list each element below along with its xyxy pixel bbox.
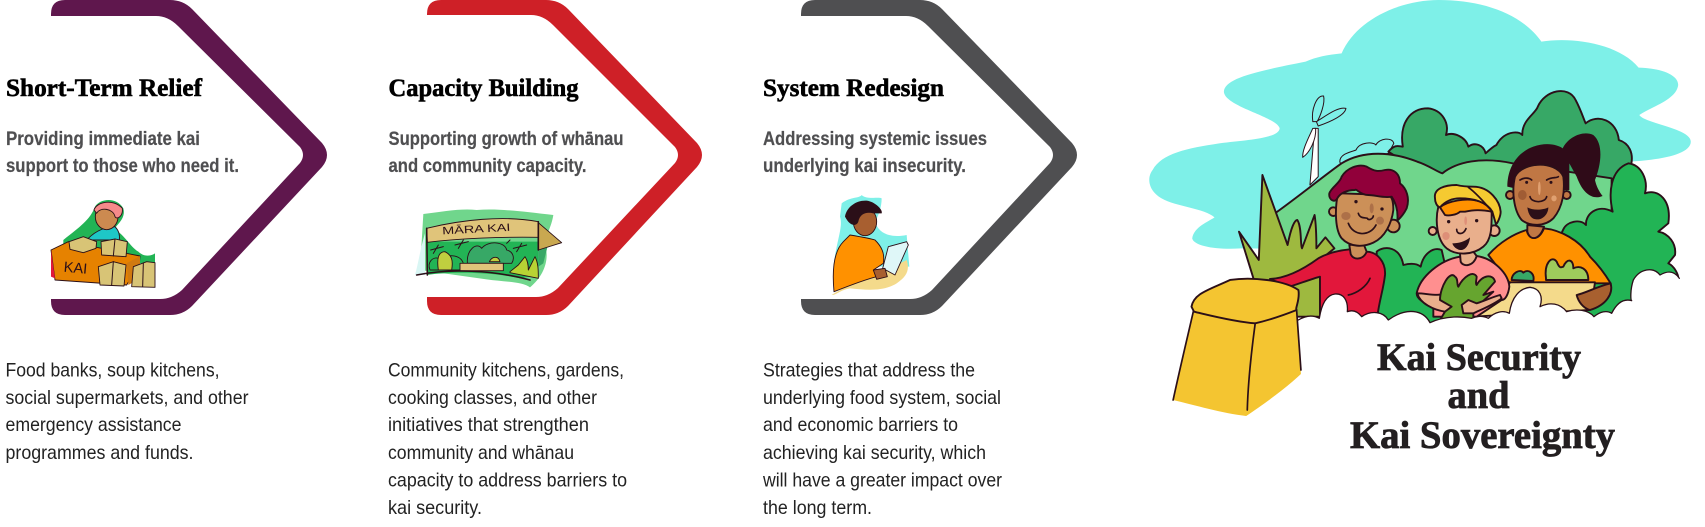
illustration: landscape background bbox=[1149, 0, 1691, 317]
icon: person with tablet bbox=[832, 195, 909, 295]
bush between people bbox=[1377, 248, 1460, 330]
panel: system redesign bbox=[762, 0, 1077, 519]
body text: short-term relief: Food banks, soup kitchens, bbox=[6, 360, 220, 382]
cloud bbox=[1149, 0, 1691, 250]
title: kai security and kai sovereignty bbox=[1350, 336, 1615, 457]
subheading: short-term relief: Providing immediate kai bbox=[6, 128, 200, 150]
body text: capacity building: Community kitchens, gardens, bbox=[388, 360, 624, 382]
body text: system redesign: Strategies that address the bbox=[763, 360, 975, 382]
white scalloped ground bbox=[1298, 270, 1705, 420]
heading: short-term relief: Short-Term Relief bbox=[6, 75, 203, 102]
body text: system redesign: the long term. bbox=[763, 497, 872, 519]
subheading: capacity building: Supporting growth of whānau bbox=[388, 128, 624, 150]
title: kai security and kai sovereignty: and bbox=[1448, 374, 1510, 417]
icon: food bank stall: KAI bbox=[63, 260, 88, 278]
person: orange shirt with ponytail bbox=[1473, 133, 1678, 320]
body text: capacity building bbox=[388, 360, 627, 519]
chevron: purple bbox=[51, 0, 327, 315]
person: boy with yellow cap bbox=[1417, 185, 1509, 320]
body text: capacity building: cooking classes, and other bbox=[388, 387, 597, 409]
subheading: short-term relief bbox=[6, 128, 239, 177]
body text: system redesign: and economic barriers to bbox=[763, 414, 958, 436]
panel: short-term relief bbox=[6, 0, 327, 464]
subheading: system redesign: Addressing systemic issues bbox=[763, 128, 987, 150]
chevron: grey bbox=[801, 0, 1077, 315]
yellow box bbox=[1173, 279, 1301, 416]
subheading: system redesign bbox=[763, 128, 987, 177]
body text: short-term relief: emergency assistance bbox=[6, 414, 182, 436]
body text: short-term relief: social supermarkets, and other bbox=[6, 387, 249, 409]
subheading: short-term relief: support to those who need it. bbox=[6, 155, 239, 177]
chevron: red bbox=[427, 0, 702, 315]
subheading: capacity building: and community capacity. bbox=[388, 155, 586, 177]
body text: short-term relief bbox=[6, 360, 249, 464]
right bush bbox=[1520, 163, 1678, 320]
heading: system redesign: System Redesign bbox=[763, 75, 944, 102]
icon: māra kai garden: MĀRA KAI bbox=[442, 222, 511, 237]
title: kai security and kai sovereignty: Kai Sovereignty bbox=[1350, 414, 1615, 457]
subheading: capacity building bbox=[388, 128, 624, 177]
body text: system redesign: will have a greater impact over bbox=[762, 469, 1002, 491]
heading: capacity building: Capacity Building bbox=[388, 75, 579, 102]
body text: capacity building: initiatives that strengthen bbox=[388, 414, 589, 436]
body text: capacity building: capacity to address barriers to bbox=[388, 469, 627, 491]
body text: system redesign bbox=[762, 360, 1002, 519]
body text: short-term relief: programmes and funds. bbox=[6, 442, 194, 464]
hill bbox=[1275, 154, 1612, 267]
back trees bbox=[1388, 91, 1632, 180]
body text: system redesign: underlying food system, social bbox=[763, 387, 1001, 409]
icon: māra kai garden bbox=[415, 210, 562, 287]
body text: capacity building: kai security. bbox=[388, 497, 482, 519]
body text: capacity building: community and whānau bbox=[388, 442, 574, 464]
person: red shirt with curly hair bbox=[1270, 166, 1460, 330]
body text: system redesign: achieving kai security, which bbox=[763, 442, 986, 464]
icon: food bank stall bbox=[51, 200, 155, 287]
subheading: system redesign: underlying kai insecurity. bbox=[763, 155, 966, 177]
wind turbine bbox=[1303, 96, 1346, 185]
title: kai security and kai sovereignty: Kai Security bbox=[1377, 336, 1581, 379]
plant bbox=[1239, 175, 1334, 317]
panel: capacity building bbox=[388, 0, 702, 519]
distant bush bbox=[1340, 139, 1394, 167]
panel: kai security illustration bbox=[1149, 0, 1705, 457]
